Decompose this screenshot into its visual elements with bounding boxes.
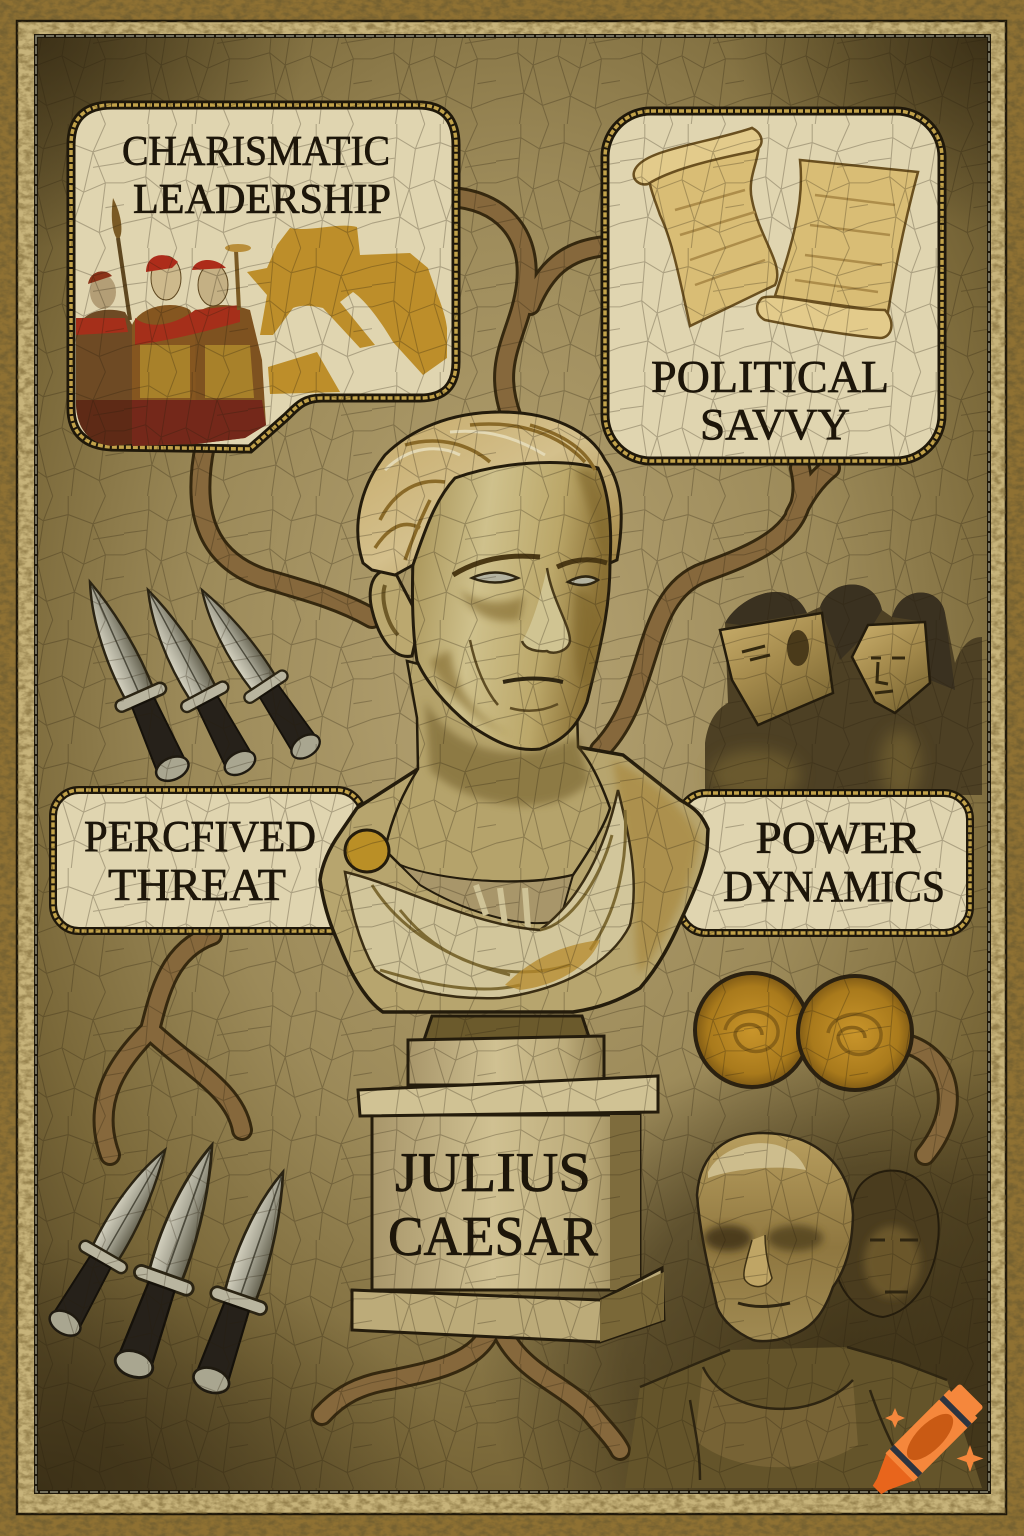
mouth — [503, 678, 563, 682]
shadow figure — [835, 1171, 939, 1317]
right mask — [852, 622, 930, 713]
panel: perceived threat — [53, 790, 363, 931]
panel: power dynamics — [680, 793, 970, 933]
roots connecting the panels — [104, 197, 948, 1450]
heading: POLITICAL — [651, 351, 889, 402]
icon: three daggers upper left — [65, 571, 332, 790]
left mask — [720, 613, 833, 725]
name text: JULIUS — [395, 1142, 591, 1204]
ear — [370, 571, 420, 656]
hair — [358, 412, 621, 575]
nose — [522, 568, 570, 653]
icon: crayon watermark — [863, 1381, 986, 1504]
name text — [388, 1142, 599, 1268]
heading: CHARISMATIC — [122, 129, 390, 175]
heading: POWER — [756, 813, 920, 863]
shoulder right gold tint — [612, 760, 700, 975]
body — [625, 1347, 982, 1488]
plinth with name — [352, 1016, 664, 1342]
masked figures — [705, 584, 982, 800]
panel: political savvy: SAVVY — [700, 400, 850, 449]
panel: perceived threat: THREAT — [108, 859, 286, 910]
shoulders — [320, 747, 708, 1012]
name text: CAESAR — [388, 1206, 599, 1268]
face — [412, 461, 611, 750]
icon: gold coins — [695, 973, 912, 1090]
marble bust of Caesar — [320, 412, 708, 1012]
scroll left — [634, 128, 777, 326]
face shading — [430, 470, 607, 735]
panel: political savvy — [605, 111, 942, 461]
map of the Mediterranean — [247, 226, 447, 394]
head — [697, 1133, 853, 1341]
panel: charismatic leadership: LEADERSHIP — [133, 177, 391, 223]
icon: three daggers lower left — [37, 1135, 311, 1401]
panel: power dynamics: DYNAMICS — [723, 862, 945, 911]
scroll right — [757, 160, 918, 338]
second portrait: Brutus and shadow figure — [625, 1133, 982, 1488]
brooch — [345, 830, 389, 872]
panel: charismatic leadership — [71, 105, 456, 449]
roman soldiers — [76, 198, 266, 446]
neck — [385, 661, 610, 882]
eyes and brows — [453, 556, 607, 575]
tunic and toga folds — [400, 865, 573, 923]
heading: PERCFIVED — [84, 812, 316, 861]
